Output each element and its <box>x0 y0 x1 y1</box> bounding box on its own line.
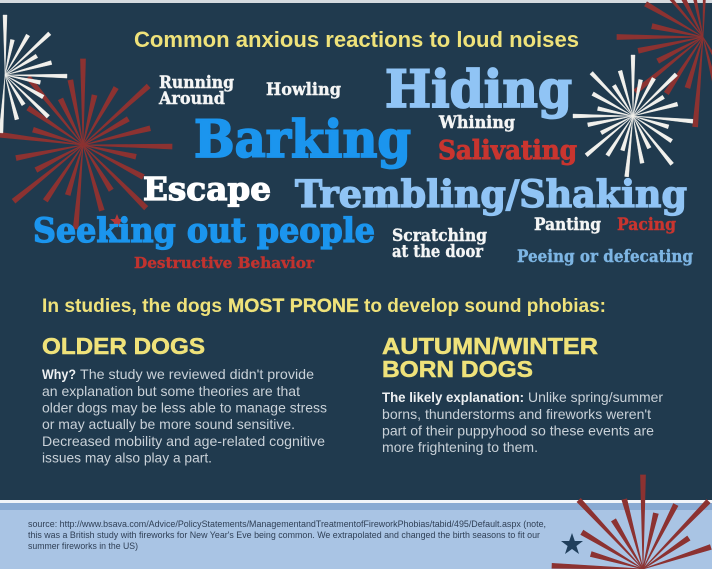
icon: white firework top left <box>0 15 67 133</box>
icon: red star <box>110 214 124 228</box>
word: Trembling/Shaking: Trembling/Shaking <box>295 172 687 216</box>
panel: older dogs <box>42 333 327 466</box>
word: Barking: Barking <box>194 110 411 170</box>
text block: why: Decreased mobility and age-related cognitive <box>42 434 325 449</box>
word: Destructive Behavior: Destructive Behavior <box>134 254 315 272</box>
icon: navy star <box>561 533 583 554</box>
icon: red firework bottom <box>552 475 711 569</box>
heading: autumn winter born dogs: AUTUMN/WINTER <box>382 333 598 359</box>
word: Howling: Howling <box>266 80 341 100</box>
top light strip <box>0 0 712 3</box>
source note <box>28 519 546 551</box>
subheading: studies: to develop sound phobias: <box>364 295 606 317</box>
subheading: studies: In studies, the dogs <box>42 295 222 317</box>
icon: white firework right <box>573 55 693 177</box>
icon: red firework top right <box>617 0 712 127</box>
word: Pacing: Pacing <box>617 215 676 235</box>
word: Scratching at the door: at the door <box>392 242 484 262</box>
source note: this was a British study with fireworks for New Year's Eve being common. We extrapolated and changed the birth seasons to fit our <box>28 530 540 540</box>
title: Common anxious reactions to loud noises <box>134 27 579 52</box>
text block: why: or may actually be more sound sensitive. <box>42 417 295 432</box>
text block: likely explanation: The likely explanation: <box>382 390 524 405</box>
text block: likely explanation: Unlike spring/summer <box>528 390 663 405</box>
text block: likely explanation <box>382 390 663 455</box>
word: Panting: Panting <box>534 215 601 235</box>
word: Hiding: Hiding <box>385 60 572 120</box>
word cloud <box>33 60 693 272</box>
word: Running Around: Around <box>158 89 225 109</box>
word: Escape: Escape <box>143 170 271 208</box>
footer band <box>0 500 712 569</box>
text block: likely explanation: part of their puppyhood so these events are <box>382 424 654 438</box>
word: Scratching at the door <box>392 226 487 262</box>
text block: why: an explanation but some theories are that <box>42 384 300 399</box>
text block: why: older dogs may be less able to manage stress <box>42 400 327 416</box>
word: Whining: Whining <box>438 113 515 133</box>
word: Running Around: Running <box>159 73 234 93</box>
word: Seeking out people: Seeking out people <box>33 211 375 251</box>
heading: autumn winter born dogs: BORN DOGS <box>382 356 533 382</box>
text block: why: The study we reviewed didn't provide <box>80 367 314 382</box>
subheading: studies: MOST PRONE <box>228 295 359 317</box>
text block: why: issues may also play a part. <box>42 450 212 466</box>
source note: source: http://www.bsava.com/Advice/PolicyStatements/ManagementandTreatmentofFireworkPhobias/tabid/495/Default.aspx (note, <box>28 519 546 529</box>
text block: likely explanation: more frightening to them. <box>382 440 538 455</box>
icon: red firework left <box>0 59 172 229</box>
word: Salivating: Salivating <box>438 136 577 166</box>
source note: summer fireworks in the US) <box>28 541 138 551</box>
subheading: studies <box>42 295 606 317</box>
panel: autumn winter born dogs <box>382 333 663 455</box>
heading: older dogs: OLDER DOGS <box>42 333 205 359</box>
word: Peeing or defecating: Peeing or defecating <box>517 247 693 267</box>
text block: why: Why? <box>42 367 76 382</box>
text block: why <box>42 367 327 466</box>
text block: likely explanation: borns, thunderstorms and fireworks weren't <box>382 407 651 422</box>
word: Running Around <box>158 73 234 109</box>
word: Scratching at the door: Scratching <box>392 226 487 246</box>
heading: autumn winter born dogs <box>382 333 598 382</box>
